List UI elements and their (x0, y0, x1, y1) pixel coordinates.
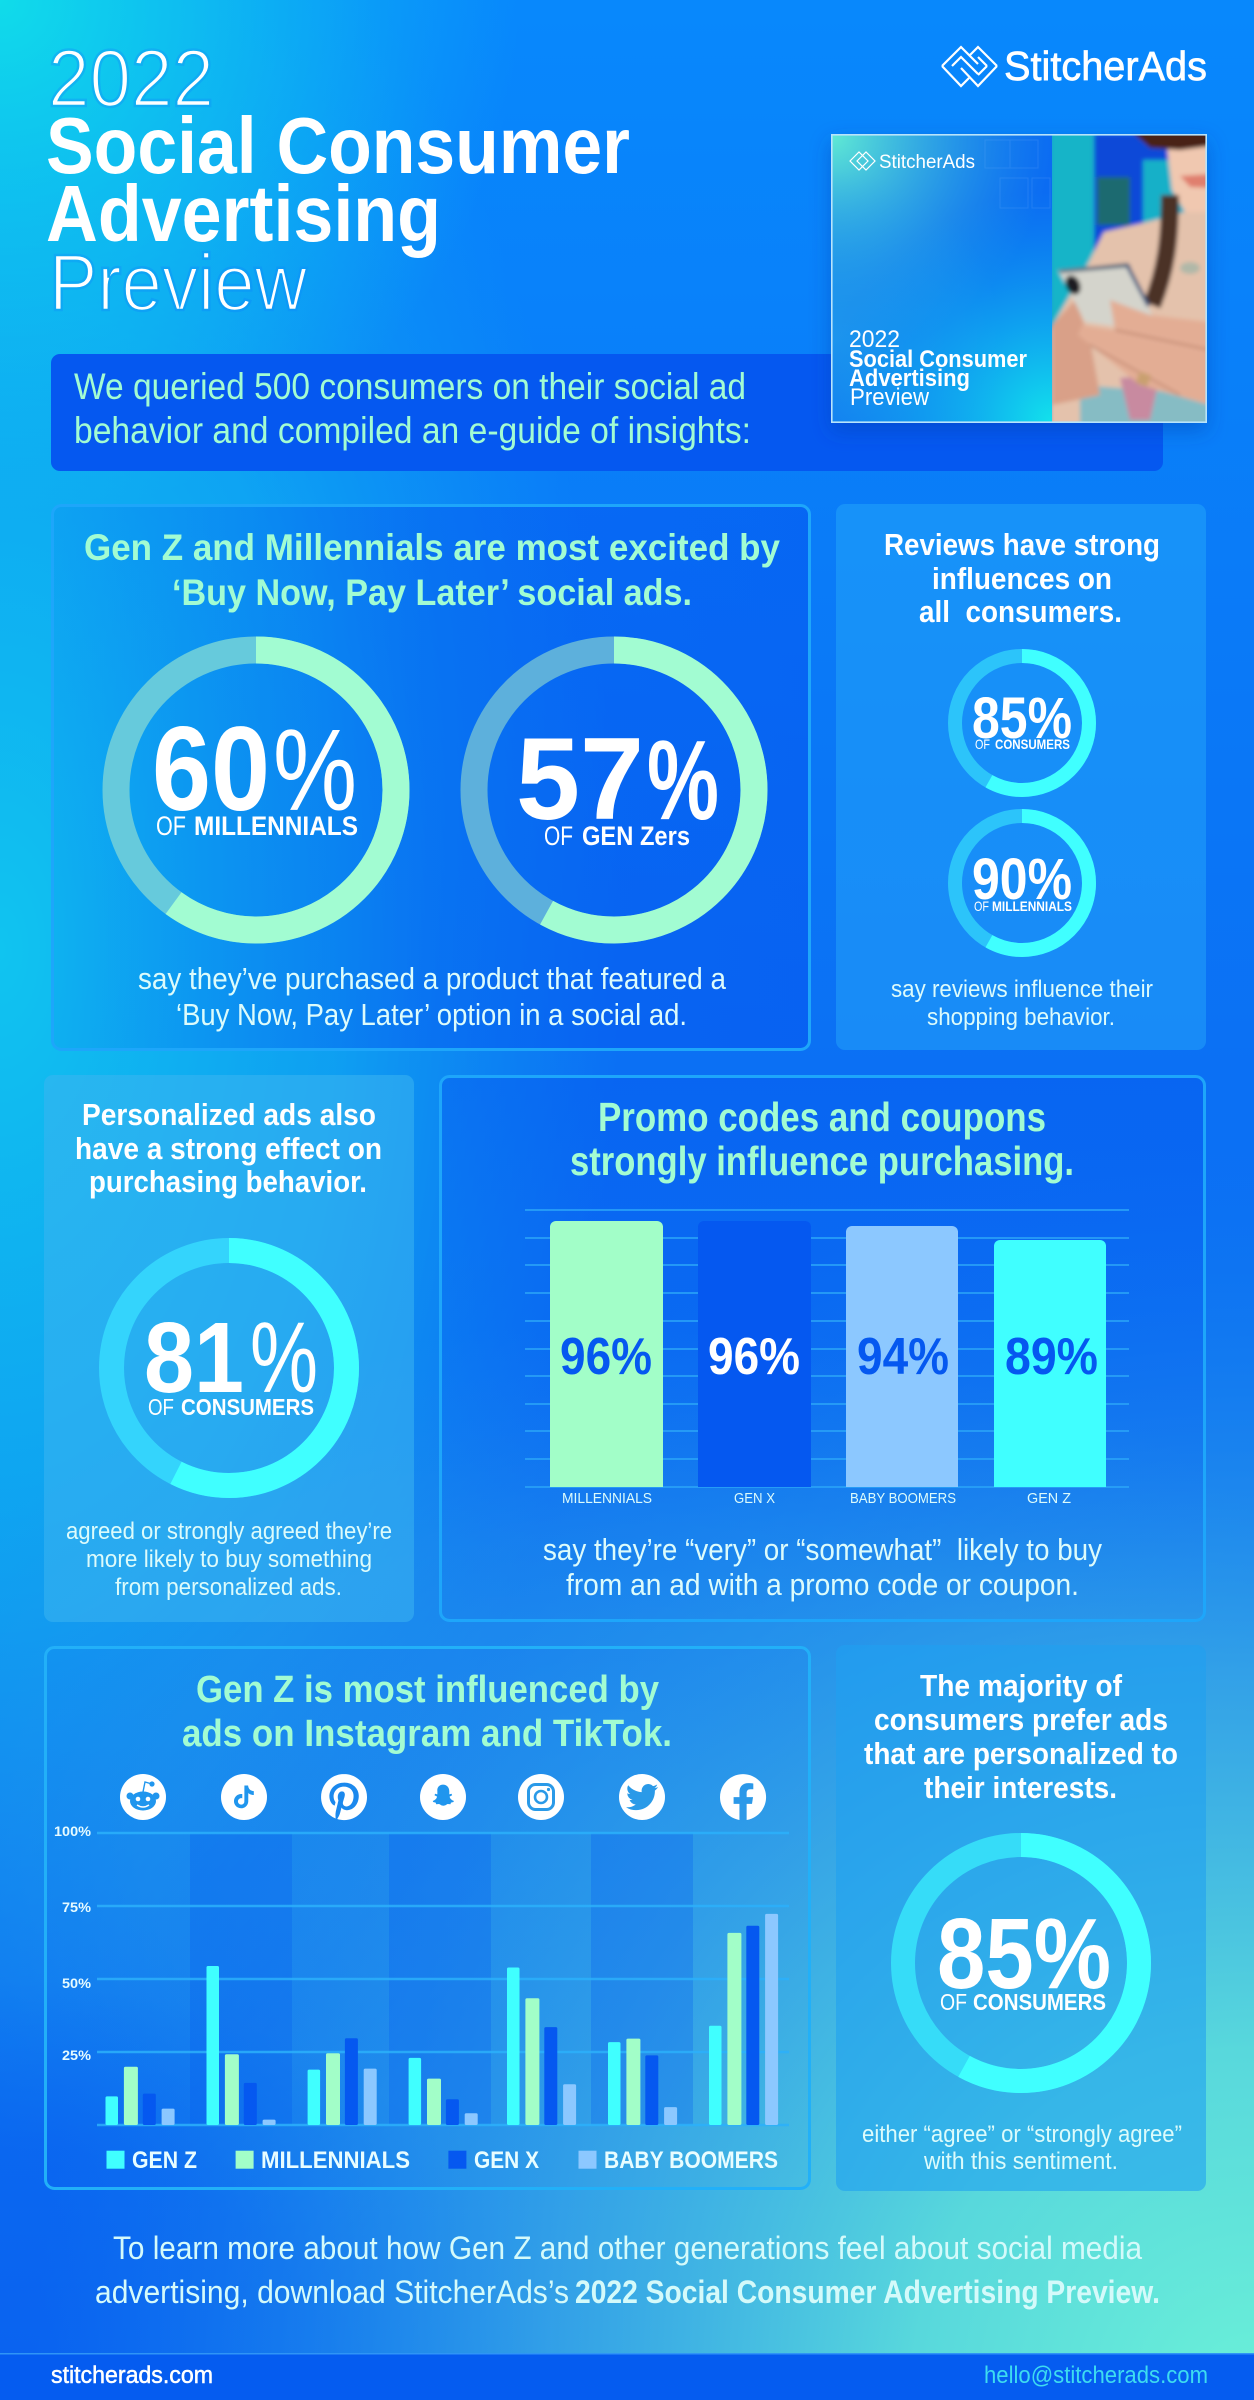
panel: personalized ads (44, 1075, 414, 1622)
icon: facebook (720, 1774, 766, 1820)
icon: instagram (518, 1774, 564, 1820)
icon: twitter (619, 1774, 665, 1820)
donut: 85% of consumers (955, 656, 1089, 790)
bar: baby boomers 94% (846, 1226, 958, 1507)
cover title: Social Consumer (849, 346, 1027, 373)
legend: BABY BOOMERS (604, 2147, 778, 2174)
donut: 81% of consumers: CONSUMERS (181, 1394, 314, 1420)
panel: buy now pay later (52, 506, 810, 1050)
bars: instagram (507, 1968, 576, 2125)
donut: 85% of consumers: OF (940, 1989, 967, 2015)
donut: 81% of consumers: OF (148, 1394, 174, 1420)
bar chart: promo codes (525, 1210, 1129, 1507)
icon: pinterest (321, 1774, 367, 1820)
bar: gen z 89%: GEN Z (1027, 1490, 1071, 1507)
cover title: Preview (850, 384, 930, 411)
closing call to action: advertising, download StitcherAds’s (95, 2274, 569, 2310)
bar: baby boomers 94%: BABY BOOMERS (850, 1490, 956, 1507)
donut: 57% of gen zers: 57 (516, 713, 644, 844)
donut: 85% of consumers (903, 1845, 1139, 2081)
heading: have a strong effect on (75, 1131, 382, 1166)
bar: gen x 96%: GEN X (734, 1490, 775, 1507)
caption (66, 1518, 392, 1601)
footer bar (0, 2353, 1254, 2400)
bar: baby boomers 94%: 94% (857, 1328, 949, 1386)
heading: The majority of (920, 1668, 1123, 1703)
legend: MILLENNIALS (261, 2147, 410, 2174)
heading: that are personalized to (864, 1736, 1178, 1771)
heading: strongly influence purchasing. (570, 1138, 1074, 1184)
panel: promo codes (440, 1076, 1204, 1620)
legend: GEN X (474, 2147, 539, 2174)
legend: GEN Z (132, 2147, 197, 2174)
donut: 90% of millennials: 90% (972, 847, 1072, 912)
bars: twitter (608, 2039, 677, 2125)
cover title (849, 326, 1027, 411)
donut: 57% of gen zers (474, 650, 754, 930)
donut: 85% of consumers: 85% (937, 1898, 1111, 2010)
logo: StitcherAds: StitcherAds (1004, 43, 1207, 89)
donut: 85% of consumers: OF (975, 736, 990, 752)
bar: millennials 96%: MILLENNIALS (562, 1490, 652, 1507)
bar: gen z 89% (994, 1240, 1106, 1507)
heading: their interests. (924, 1770, 1117, 1805)
heading: ‘Buy Now, Pay Later’ social ads. (172, 572, 692, 613)
heading (864, 1668, 1178, 1805)
closing call to action (95, 2230, 1160, 2310)
cover logo: StitcherAds (879, 152, 975, 173)
title: 2022 (48, 34, 214, 124)
donut: 90% of millennials (955, 816, 1089, 950)
caption: say they’ve purchased a product that featured a (138, 961, 727, 996)
donut: 57% of gen zers: GEN Zers (582, 821, 690, 851)
bars: facebook (709, 1914, 778, 2125)
bar: millennials 96%: 96% (560, 1328, 652, 1386)
grouped bar chart: platforms: 100% (54, 1823, 92, 1839)
heading: influences on (932, 561, 1112, 596)
donut: 57% of gen zers: % (647, 717, 719, 843)
panel: social platforms (46, 1648, 810, 2188)
cover title: 2022 (849, 326, 900, 353)
closing call to action: To learn more about how Gen Z and other generations feel about social media (113, 2230, 1142, 2266)
caption: with this sentiment. (923, 2148, 1118, 2175)
bars: pinterest (308, 2038, 377, 2125)
donut: 57% of gen zers: OF (544, 821, 573, 851)
footer bar: stitcherads.com (51, 2362, 213, 2389)
grouped bar chart: platforms: 50% (62, 1975, 92, 1991)
heading (884, 527, 1160, 629)
title: Advertising (46, 169, 441, 258)
cover title: Advertising (849, 365, 970, 392)
caption: say reviews influence their (891, 976, 1153, 1003)
donut: 81% of consumers (112, 1250, 346, 1486)
donut: 60% of millennials: MILLENNIALS (194, 811, 358, 841)
panel: reviews (836, 504, 1206, 1050)
caption (862, 2121, 1182, 2175)
heading (182, 1669, 672, 1755)
footer bar: hello@stitcherads.com (984, 2362, 1208, 2389)
caption (138, 961, 727, 1032)
caption: shopping behavior. (927, 1004, 1115, 1031)
bar: gen z 89%: 89% (1005, 1328, 1098, 1386)
caption: more likely to buy something (86, 1546, 372, 1573)
intro band (51, 354, 1163, 471)
legend (106, 2147, 778, 2174)
bars: reddit (106, 2067, 175, 2125)
icon: snapchat (420, 1774, 466, 1820)
heading: Promo codes and coupons (598, 1094, 1046, 1140)
caption: agreed or strongly agreed they’re (66, 1518, 392, 1545)
caption: either “agree” or “strongly agree” (862, 2121, 1182, 2148)
title: Preview (49, 238, 307, 327)
caption: ‘Buy Now, Pay Later’ option in a social ad. (176, 997, 687, 1032)
caption: say they’re “very” or “somewhat” likely to buy (543, 1532, 1102, 1567)
caption (543, 1532, 1102, 1602)
e-guide cover (831, 130, 1210, 430)
caption: from an ad with a promo code or coupon. (566, 1567, 1079, 1602)
grouped bar chart: platforms (54, 1823, 789, 2125)
icon: tiktok (221, 1774, 267, 1820)
donut: 60% of millennials: 60 (152, 702, 270, 836)
bars: snapchat (409, 2058, 478, 2125)
cover gradient side (832, 135, 1052, 422)
donut: 60% of millennials (116, 650, 396, 930)
panel: majority prefer personalized (836, 1645, 1206, 2191)
heading: all consumers. (919, 594, 1122, 629)
donut: 81% of consumers: 81 (144, 1302, 244, 1414)
intro band: behavior and compiled an e-guide of insights: (74, 410, 751, 451)
bar: gen x 96%: 96% (708, 1328, 800, 1386)
heading: Gen Z and Millennials are most excited by (84, 527, 780, 568)
closing call to action: 2022 Social Consumer Advertising Preview. (575, 2274, 1160, 2310)
heading (75, 1097, 382, 1199)
grouped bar chart: platforms: 25% (62, 2047, 92, 2063)
heading: Gen Z is most influenced by (196, 1669, 659, 1711)
heading: ads on Instagram and TikTok. (182, 1713, 672, 1755)
grouped bar chart: platforms: 75% (62, 1899, 92, 1915)
caption (891, 976, 1153, 1031)
heading (84, 527, 780, 613)
caption: from personalized ads. (115, 1574, 342, 1601)
bar: gen x 96% (698, 1221, 811, 1507)
donut: 85% of consumers: 85% (972, 686, 1072, 751)
donut: 85% of consumers: CONSUMERS (973, 1989, 1106, 2015)
intro band: We queried 500 consumers on their social ad (74, 366, 746, 407)
donut: 60% of millennials: OF (156, 811, 186, 841)
heading: Reviews have strong (884, 527, 1160, 562)
icon: reddit (120, 1774, 166, 1820)
title (46, 34, 630, 327)
heading: consumers prefer ads (874, 1702, 1168, 1737)
bar: millennials 96% (550, 1221, 663, 1507)
title: Social Consumer (46, 101, 630, 190)
donut: 81% of consumers: % (250, 1302, 318, 1414)
heading (570, 1094, 1074, 1184)
cover photo (1050, 130, 1210, 430)
donut: 85% of consumers: CONSUMERS (995, 736, 1070, 752)
bars: tiktok (206, 1966, 276, 2125)
heading: Personalized ads also (82, 1097, 376, 1132)
heading: purchasing behavior. (89, 1164, 367, 1199)
donut: 60% of millennials: % (273, 705, 357, 835)
donut: 90% of millennials: OF (974, 898, 989, 914)
donut: 90% of millennials: MILLENNIALS (992, 898, 1072, 914)
